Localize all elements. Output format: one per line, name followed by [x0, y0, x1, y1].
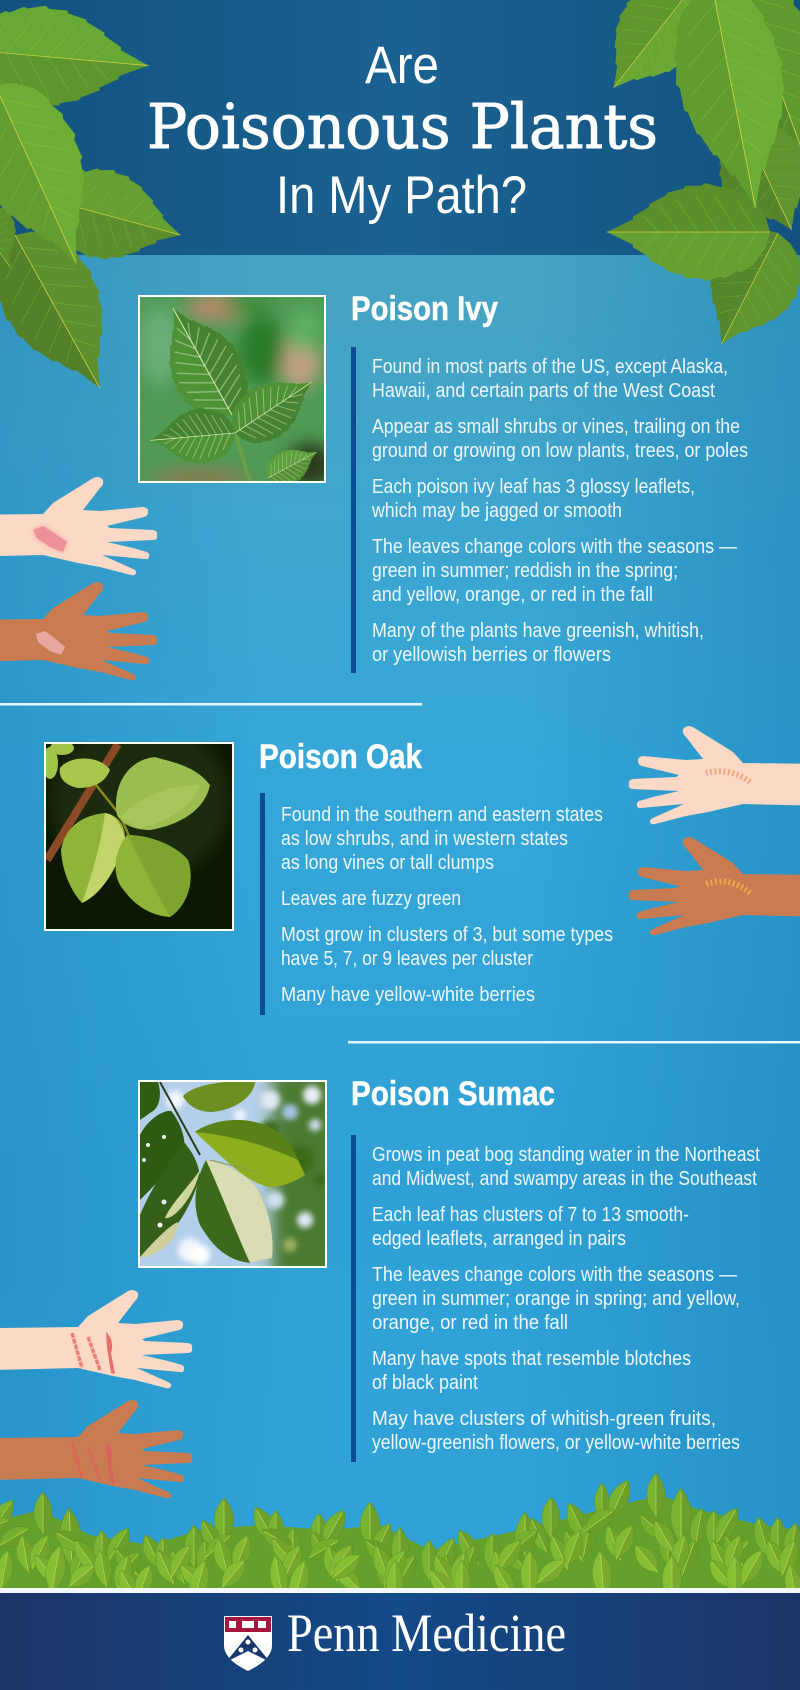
title: Are	[365, 36, 439, 95]
text block: May have clusters of whitish-green fruits,	[372, 1407, 716, 1430]
text block: green in summer; orange in spring; and yellow,	[372, 1287, 740, 1310]
icon: light hand with sumac rash	[0, 1290, 192, 1388]
text block: orange, or red in the fall	[372, 1311, 568, 1334]
icon: Penn shield	[224, 1616, 272, 1671]
photo: poison oak leaves	[44, 742, 234, 931]
text block	[371, 355, 748, 666]
footer band	[0, 1593, 800, 1690]
icon: tan hand with ivy rash	[0, 582, 157, 680]
text block: Appear as small shrubs or vines, trailing on the	[372, 415, 740, 438]
text block: Hawaii, and certain parts of the West Coast	[372, 379, 715, 402]
text block: green in summer; reddish in the spring;	[372, 559, 678, 582]
text block: The leaves change colors with the seasons —	[372, 535, 737, 558]
text block: edged leaflets, arranged in pairs	[372, 1227, 626, 1250]
text block: which may be jagged or smooth	[371, 499, 622, 522]
text block: Each poison ivy leaf has 3 glossy leaflets,	[372, 475, 695, 498]
icon: light hand with ivy rash	[0, 477, 157, 575]
panel: poison sumac	[0, 1070, 760, 1498]
wordmark: Penn Medicine	[287, 1603, 566, 1663]
header band	[0, 0, 800, 255]
heading: Poison Sumac	[351, 1075, 555, 1113]
photo: poison sumac leaves	[138, 1080, 327, 1268]
divider	[0, 703, 422, 706]
heading: Poison Ivy	[351, 290, 498, 328]
title: In My Path?	[276, 166, 527, 225]
text block: Found in most parts of the US, except Alaska,	[372, 355, 728, 378]
footer divider	[0, 1588, 800, 1593]
top-left leaves	[0, 0, 192, 412]
title	[147, 36, 658, 225]
bush of leaves along the bottom	[0, 1472, 800, 1588]
text block	[281, 803, 613, 1006]
text block: as long vines or tall clumps	[281, 851, 494, 874]
text block: Leaves are fuzzy green	[281, 887, 461, 910]
icon: tan hand with oak rash	[629, 837, 800, 935]
panel: poison oak	[42, 720, 800, 1015]
text block: The leaves change colors with the seasons —	[372, 1263, 737, 1286]
text block: Many have spots that resemble blotches	[372, 1347, 691, 1370]
text block: Each leaf has clusters of 7 to 13 smooth-	[372, 1203, 689, 1226]
text block: Many of the plants have greenish, whitish,	[372, 619, 704, 642]
text block: Found in the southern and eastern states	[281, 803, 603, 826]
panel: poison ivy	[0, 290, 748, 680]
top-right leaves	[581, 0, 800, 365]
text block: Many have yellow-white berries	[281, 983, 535, 1006]
divider	[348, 1041, 800, 1044]
title: Poisonous Plants	[147, 90, 658, 163]
photo: poison ivy leaves	[138, 295, 326, 483]
text block	[372, 1143, 760, 1454]
icon: tan hand with sumac rash	[0, 1400, 192, 1498]
icon: light hand with oak rash	[629, 726, 800, 824]
text block: of black paint	[372, 1371, 478, 1394]
text block: as low shrubs, and in western states	[281, 827, 568, 850]
text block: or yellowish berries or flowers	[372, 643, 611, 666]
accent bar	[260, 793, 265, 1015]
text block: have 5, 7, or 9 leaves per cluster	[281, 947, 533, 970]
logo: Penn Medicine	[224, 1614, 564, 1671]
accent bar	[351, 1135, 356, 1462]
text block: ground or growing on low plants, trees, or poles	[372, 439, 748, 462]
text block: yellow-greenish flowers, or yellow-white berries	[372, 1431, 740, 1454]
heading: Poison Oak	[259, 738, 422, 776]
accent bar	[351, 347, 356, 673]
text block: and yellow, orange, or red in the fall	[372, 583, 653, 606]
text block: Most grow in clusters of 3, but some types	[281, 923, 613, 946]
